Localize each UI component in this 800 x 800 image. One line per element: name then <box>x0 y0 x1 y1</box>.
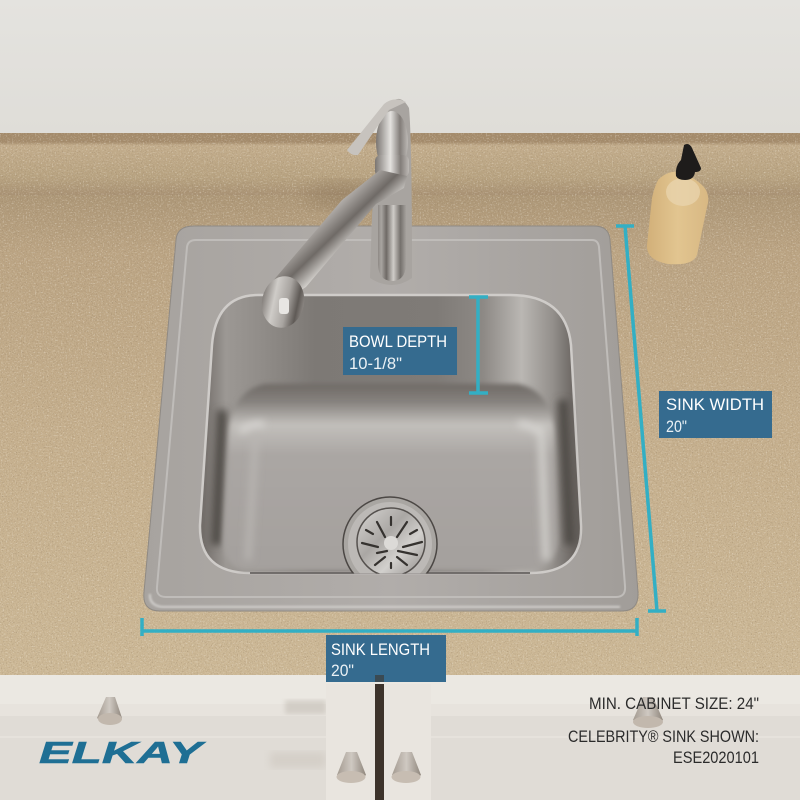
dimension: sink length <box>142 618 637 636</box>
model text <box>568 727 759 767</box>
backsplash <box>0 133 800 196</box>
faucet head <box>257 272 309 332</box>
dimension: bowl depth <box>469 297 488 393</box>
dimension: sink width <box>616 226 666 611</box>
sink deck <box>144 226 638 611</box>
faucet lever <box>347 99 406 155</box>
sink <box>144 226 638 611</box>
cabinet knobs <box>97 697 663 783</box>
label: sink length: 20" <box>331 661 354 680</box>
bowl floor highlights <box>240 424 546 560</box>
soap body <box>647 172 708 264</box>
faucet <box>257 99 412 332</box>
faucet ball <box>376 111 408 173</box>
cabinet size text: MIN. CABINET SIZE: 24" <box>589 694 759 713</box>
soap pump <box>676 144 701 180</box>
countertop <box>0 195 800 676</box>
knob 3 <box>336 752 366 783</box>
model text: ESE2020101 <box>673 748 759 767</box>
logo: Elkay: ELKAY <box>39 735 207 770</box>
faucet post <box>370 99 412 285</box>
faucet spout <box>272 170 407 300</box>
bowl bottom edge <box>250 572 530 574</box>
bowl side shadows <box>216 400 570 545</box>
label: bowl depth <box>343 327 457 375</box>
drain <box>342 496 438 574</box>
label: sink width <box>659 391 772 438</box>
cabinet stile <box>326 684 431 800</box>
knob 2 <box>633 697 663 728</box>
bowl floor <box>223 384 558 571</box>
model text: CELEBRITY® SINK SHOWN: <box>568 727 759 746</box>
soap bottle <box>647 144 708 264</box>
wall <box>0 0 800 133</box>
cabinets <box>0 675 800 800</box>
label: sink width: SINK WIDTH <box>666 395 764 414</box>
label: sink width: 20" <box>666 417 687 436</box>
bowl <box>200 295 581 573</box>
cabinet door gap <box>375 684 384 800</box>
label: bowl depth: 10-1/8" <box>349 354 402 373</box>
label: sink length: SINK LENGTH <box>331 640 430 659</box>
knob 1 <box>97 697 122 725</box>
label: bowl depth: BOWL DEPTH <box>349 332 447 351</box>
label: sink length <box>326 635 446 682</box>
knob 4 <box>392 752 421 783</box>
